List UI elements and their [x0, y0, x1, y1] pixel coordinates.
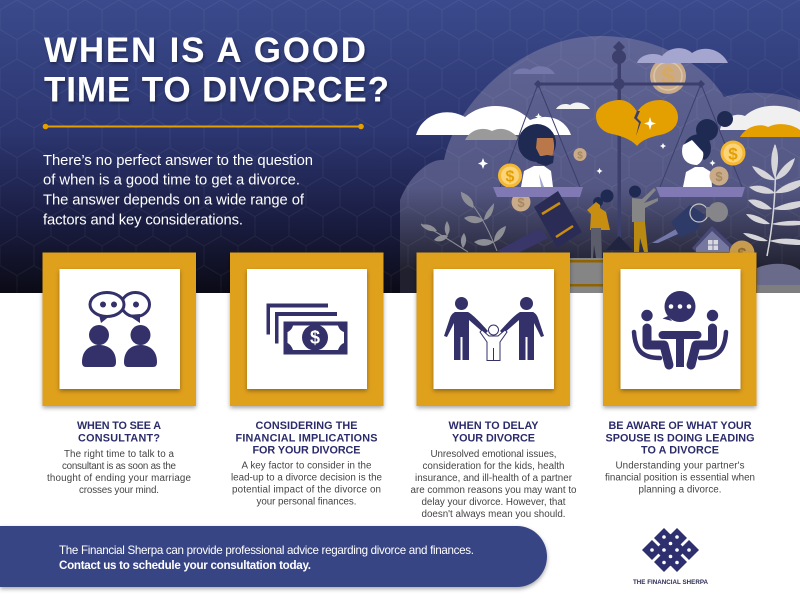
- body: financial implications: your personal finances.: [256, 496, 356, 508]
- house: [692, 226, 732, 252]
- icon: people at table: [634, 291, 726, 367]
- coin near house: $: [738, 246, 747, 263]
- body: be aware: financial position is essential when: [605, 472, 755, 484]
- icon: two people talking: [82, 292, 157, 367]
- gold cloud right: [740, 124, 800, 137]
- key: [652, 202, 728, 243]
- man figure standing: [629, 186, 658, 252]
- heading: be aware: [606, 420, 754, 456]
- woman on right pan: [682, 111, 733, 187]
- coin below left pan: $: [517, 195, 525, 210]
- hex overlay on hill: [400, 36, 800, 293]
- coin right of woman: [720, 140, 746, 166]
- heading: when to delay: WHEN TO DELAY: [448, 420, 539, 432]
- call to action text: The Financial Sherpa can provide professional advice regarding divorce and finances.: [59, 544, 474, 557]
- body: when to delay: [410, 449, 577, 520]
- body: when to delay: insurance, and ill-health of a partner: [415, 473, 573, 484]
- heading: financial implications: FINANCIAL IMPLICATIONS: [236, 432, 378, 444]
- heading: be aware: SPOUSE IS DOING LEADING: [606, 432, 754, 444]
- call to action text: [59, 544, 474, 572]
- body: when to delay: delay your divorce. However, that: [422, 497, 566, 508]
- call to action text: Contact us to schedule your consultation today.: [59, 559, 311, 572]
- icon: banknotes: [266, 304, 348, 354]
- body: when to see a consultant: thought of ending your marriage: [47, 473, 192, 484]
- heading: when to see a consultant: WHEN TO SEE A: [77, 420, 161, 432]
- title: TIME TO DIVORCE?: [44, 70, 389, 110]
- body: when to see a consultant: The right time to talk to a: [64, 449, 175, 460]
- call to action band: [0, 526, 547, 587]
- white cloud left: [416, 106, 571, 135]
- heading: be aware: BE AWARE OF WHAT YOUR: [608, 420, 752, 432]
- title divider: [43, 124, 364, 129]
- intro text: There’s no perfect answer to the question: [43, 153, 313, 169]
- logo: [633, 528, 709, 586]
- column 1 text: [47, 420, 192, 496]
- intro text: [43, 153, 313, 228]
- small purple cloud: [513, 66, 555, 74]
- coin behind cloud: $: [661, 63, 675, 90]
- coin beside woman: [710, 166, 728, 186]
- heading: when to see a consultant: CONSULTANT?: [78, 432, 160, 444]
- broken heart: [596, 100, 678, 146]
- body: financial implications: A key factor to consider in the: [242, 460, 372, 472]
- scale strings: [500, 84, 742, 187]
- heading: when to delay: YOUR DIVORCE: [452, 432, 535, 444]
- logo mark: endless knot: [642, 528, 699, 572]
- sparkles: [478, 113, 716, 174]
- hill backdrop: [400, 36, 800, 293]
- coin below left pan: [512, 192, 530, 212]
- body: be aware: [605, 460, 755, 496]
- card: consultant: [42, 252, 196, 406]
- coin left of man: [498, 164, 522, 188]
- intro text: factors and key considerations.: [43, 212, 243, 228]
- header background: [0, 0, 800, 293]
- plant left: [421, 192, 506, 252]
- body: when to delay: consideration for the kids, health: [422, 461, 564, 472]
- right pan: [656, 187, 745, 197]
- lavender cloud: [637, 48, 728, 63]
- heading: financial implications: FOR YOUR DIVORCE: [252, 444, 360, 456]
- plant right: [743, 144, 800, 256]
- card: finances: [230, 252, 384, 406]
- card: spouse: [603, 252, 756, 406]
- heading: financial implications: [236, 420, 378, 456]
- heading: when to see a consultant: [77, 420, 161, 444]
- icon: family holding hands: [444, 297, 544, 360]
- title: [44, 31, 389, 110]
- grey cloud: [465, 129, 520, 140]
- body: when to delay: are common reasons you may want to: [410, 485, 577, 496]
- coin behind cloud: [650, 58, 686, 94]
- title: WHEN IS A GOOD: [44, 31, 366, 70]
- body: when to see a consultant: [47, 449, 192, 496]
- icon: banknotes: $: [310, 328, 320, 348]
- heading: when to delay: [448, 420, 539, 444]
- body: be aware: planning a divorce.: [638, 484, 722, 496]
- body: be aware: Understanding your partner's: [616, 460, 745, 472]
- coin beside woman: $: [715, 169, 723, 184]
- coin near house: [730, 240, 754, 266]
- woman figure standing: [587, 190, 614, 258]
- white cloud right: [720, 106, 800, 130]
- heading: financial implications: CONSIDERING THE: [256, 420, 358, 432]
- column 2 text: [231, 420, 383, 508]
- column 3 text: [410, 420, 577, 520]
- small coin center: [574, 148, 586, 162]
- body: when to see a consultant: crosses your mind.: [79, 485, 159, 496]
- body: financial implications: lead-up to a divorce decision is the: [231, 472, 383, 484]
- body: financial implications: potential impact of the divorce on: [232, 484, 381, 496]
- card: delay: [416, 252, 570, 406]
- body: when to delay: doesn't always mean you should.: [422, 509, 566, 520]
- logo wordmark: THE FINANCIAL SHERPA: [633, 579, 709, 586]
- coin left of man: $: [506, 168, 515, 186]
- heading: be aware: TO A DIVORCE: [641, 444, 719, 456]
- small white cloud: [556, 102, 590, 109]
- body: financial implications: [231, 460, 383, 508]
- body: when to delay: Unresolved emotional issues,: [430, 449, 556, 460]
- small coin center: $: [577, 150, 583, 162]
- man on left pan: [518, 124, 556, 187]
- left pan: [493, 187, 583, 197]
- column 4 text: [605, 420, 755, 496]
- gavel: [497, 191, 582, 256]
- illustration: scales of divorce: [400, 36, 800, 293]
- intro text: The answer depends on a wide range of: [43, 192, 305, 208]
- ladder and ground: [570, 258, 800, 293]
- intro text: of when is a good time to get a divorce.: [43, 172, 300, 188]
- scale stand: [534, 41, 705, 250]
- coin right of woman: $: [728, 144, 738, 164]
- body: when to see a consultant: consultant is as soon as the: [62, 461, 177, 472]
